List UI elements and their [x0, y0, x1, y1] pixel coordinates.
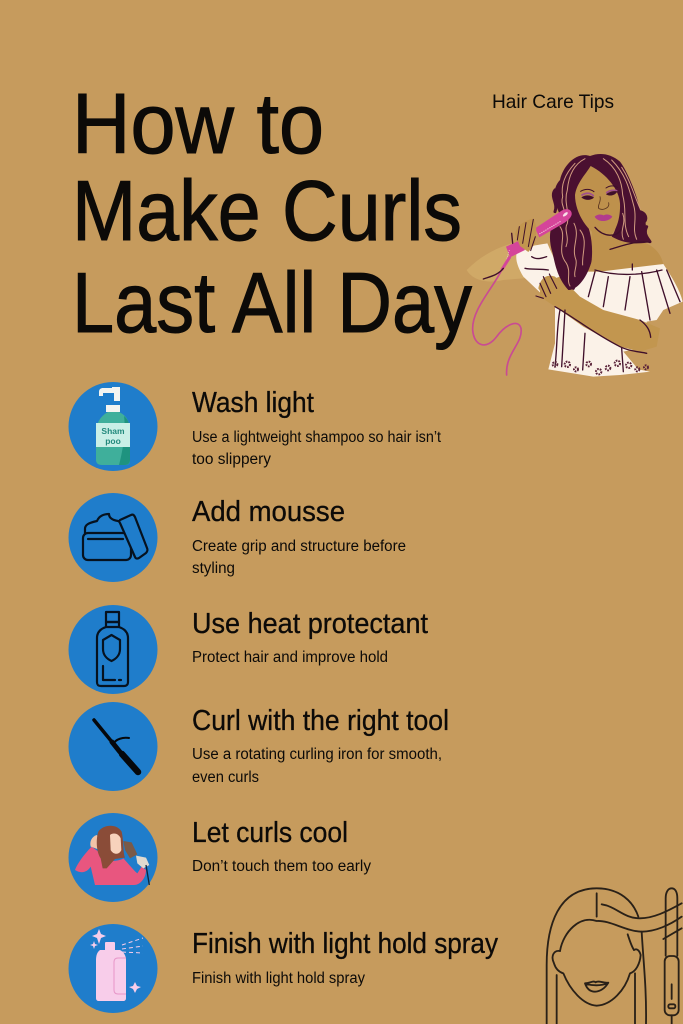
heading: Wash light — [192, 387, 314, 419]
face — [575, 166, 620, 238]
blouse — [516, 243, 683, 377]
hair mass — [550, 154, 651, 290]
step 1: wash light — [68, 382, 442, 471]
subtitle: Hair Care Tips: Hair Care Tips — [492, 91, 614, 113]
illustration: woman curling her hair — [467, 154, 683, 377]
heading: Use heat protectant — [192, 608, 428, 640]
eyes — [581, 195, 594, 200]
title: Last All Day — [72, 256, 472, 351]
title: Make Curls — [72, 164, 462, 259]
description — [192, 538, 406, 577]
icon: hair spray can — [68, 924, 158, 1013]
wavy locks — [553, 190, 650, 288]
description: even curls — [192, 769, 259, 786]
icon: curling iron — [68, 702, 158, 791]
description: Protect hair and improve hold — [192, 649, 388, 666]
step 5: let curls cool — [68, 813, 371, 902]
title: How to — [72, 77, 324, 172]
step 3: use heat protectant — [68, 605, 428, 694]
icon: shampoo bottle — [68, 382, 158, 471]
icon: shampoo bottle: Sham — [101, 426, 125, 436]
description: Use a rotating curling iron for smooth, — [192, 746, 442, 763]
icon: mousse jar — [68, 493, 158, 582]
description — [192, 429, 442, 468]
hand holding iron — [515, 219, 536, 252]
forearm — [540, 277, 660, 352]
lower hand — [536, 274, 567, 303]
heading: Let curls cool — [192, 817, 348, 849]
heading: Finish with light hold spray — [192, 928, 498, 960]
hair highlights — [560, 159, 640, 286]
brows, eyelids and nose — [581, 186, 621, 235]
icon: woman curling hair — [68, 813, 158, 902]
cord — [473, 270, 521, 375]
description: Don’t touch them too early — [192, 858, 371, 875]
icon: heat protectant bottle — [68, 605, 158, 694]
description: Create grip and structure before — [192, 538, 406, 555]
lips — [595, 214, 612, 221]
icon: shampoo bottle: poo — [105, 436, 121, 446]
description: too slippery — [192, 451, 271, 468]
step 2: add mousse — [68, 493, 406, 582]
illustration: line-art woman with flat iron — [547, 888, 682, 1024]
curling iron — [502, 209, 572, 270]
neck and shoulders — [560, 230, 663, 272]
left arm — [467, 242, 547, 282]
outline strokes — [483, 233, 680, 372]
description: Use a lightweight shampoo so hair isn’t — [192, 429, 442, 446]
description — [192, 746, 442, 786]
description: Finish with light hold spray — [192, 970, 365, 987]
title — [72, 77, 472, 351]
heading: Curl with the right tool — [192, 705, 449, 737]
step 4: curl with the right tool — [68, 702, 449, 791]
description: styling — [192, 560, 235, 577]
step 6: finish with light hold spray — [68, 924, 498, 1013]
heading: Add mousse — [192, 496, 345, 528]
hem flowers — [553, 361, 648, 374]
